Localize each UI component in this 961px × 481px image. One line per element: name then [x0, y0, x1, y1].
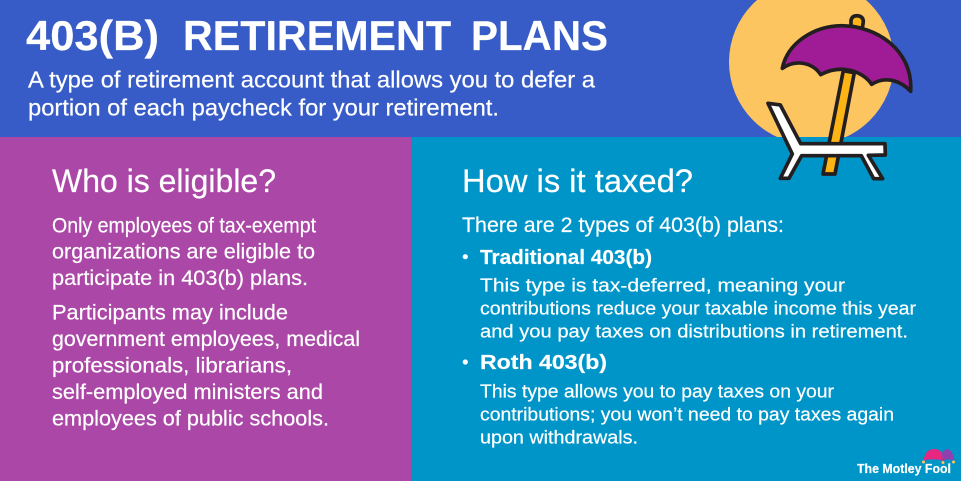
list item: traditional 403(b): [463, 247, 916, 342]
umbrella pole: [823, 16, 863, 174]
list item: roth 403(b): contributions; you won’t need to pay taxes again: [480, 404, 894, 424]
text block: eligibility: organizations are eligible to: [52, 240, 315, 264]
heading: how is it taxed: How is it taxed?: [462, 163, 693, 199]
list item: traditional 403(b): and you pay taxes on distributions in retirement.: [480, 321, 908, 342]
list item: traditional 403(b): Traditional 403(b): [480, 247, 652, 269]
panel: who is eligible: [0, 137, 411, 481]
list item: roth 403(b): Roth 403(b): [480, 352, 607, 374]
umbrella canopy: [782, 26, 911, 91]
text block: participants: Participants may include: [52, 302, 288, 324]
text block: participants: employees of public schools.: [52, 408, 329, 430]
lounge chair: [768, 103, 885, 179]
logo: The Motley Fool: [857, 449, 955, 476]
icon: beach umbrella and lounge chair: [768, 16, 911, 179]
text block: participants: [52, 302, 360, 430]
title: PLANS: [471, 12, 608, 59]
title: [26, 12, 608, 59]
list item: roth 403(b): [463, 352, 894, 448]
wordmark: The Motley Fool: [857, 461, 951, 476]
text block: eligibility: participate in 403(b) plans.: [52, 267, 308, 290]
text block: participants: self-employed ministers and: [52, 381, 323, 404]
text block: participants: professionals, librarians,: [52, 354, 292, 378]
text block: eligibility: Only employees of tax-exempt: [52, 214, 316, 238]
subtitle: portion of each paycheck for your retirement.: [28, 94, 499, 120]
title: 403(B): [26, 12, 159, 59]
subtitle: [28, 66, 596, 120]
title: RETIREMENT: [183, 12, 451, 59]
list item: traditional 403(b): This type is tax-deferred, meaning your: [480, 275, 845, 296]
list item: traditional 403(b): contributions reduce your taxable income this year: [480, 298, 916, 319]
list item: roth 403(b): This type allows you to pay taxes on your: [480, 380, 834, 402]
heading: who is eligible: Who is eligible?: [52, 163, 276, 199]
text block: participants: government employees, medical: [52, 328, 360, 351]
icon: jester hat: [922, 449, 955, 464]
subtitle: A type of retirement account that allows you to defer a: [28, 66, 596, 92]
text block: plan types intro: There are 2 types of 403(b) plans:: [462, 214, 784, 237]
panel: how is it taxed: [411, 137, 961, 481]
list item: roth 403(b): upon withdrawals.: [480, 426, 638, 448]
icon: sun: [729, 0, 894, 144]
text block: eligibility: [52, 214, 316, 290]
panel: header: [0, 0, 961, 137]
